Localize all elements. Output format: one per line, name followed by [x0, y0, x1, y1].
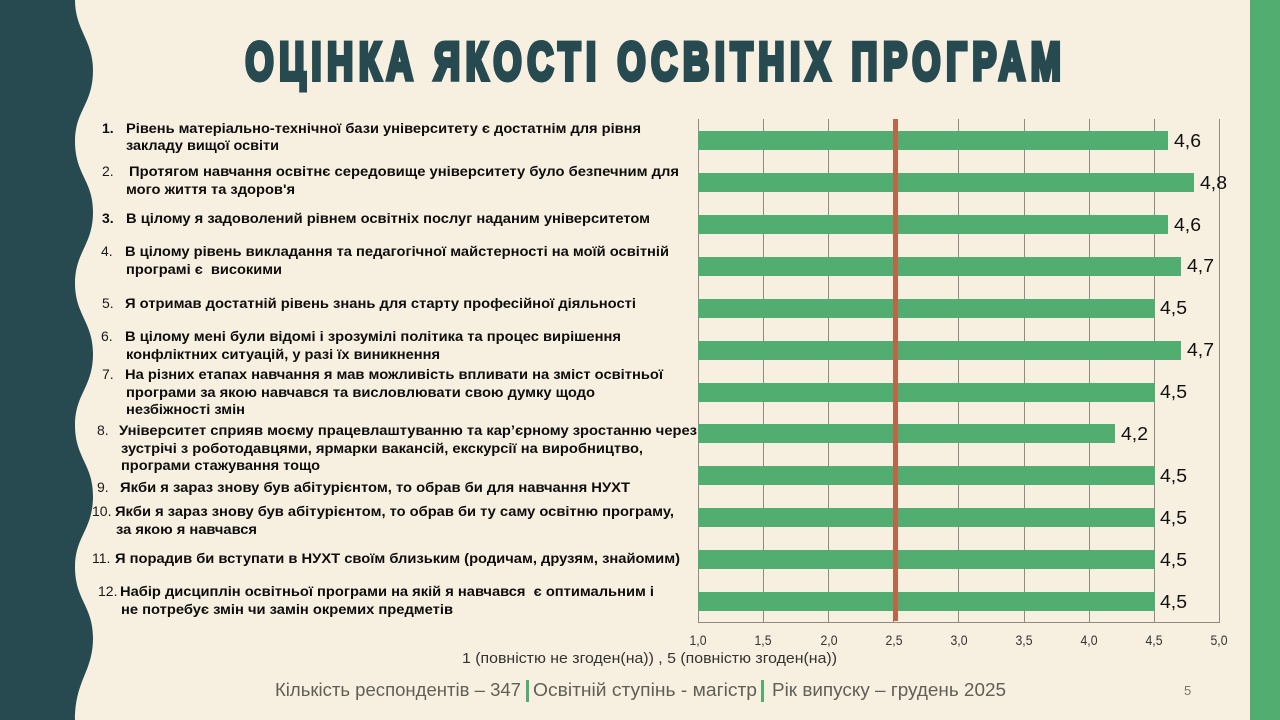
question 7: На різних етапах навчання я мав можливість впливати на зміст освітньої — [125, 367, 664, 382]
bars — [698, 131, 1194, 611]
question 12: не потребує змін чи замін окремих предметів — [121, 602, 453, 617]
x axis ticks: 5,0 — [1210, 632, 1228, 648]
value labels: 4,7 — [1187, 339, 1214, 360]
question 4: програмі є високими — [126, 262, 282, 277]
value labels: 4,5 — [1160, 507, 1187, 528]
question 8 — [97, 422, 697, 473]
question 11: Я порадив би вступати в НУХТ своїм близьким (родичам, друзям, знайомим) — [115, 551, 680, 566]
question 1 — [102, 120, 641, 153]
value labels — [1121, 130, 1227, 612]
title: ОЦІНКА ЯКОСТІ ОСВІТНІХ ПРОГРАМ — [245, 32, 1061, 91]
question 3: В цілому я задоволений рівнем освітніх послуг наданим університетом — [126, 211, 650, 226]
x axis ticks: 1,0 — [690, 632, 707, 648]
footer: Кількість респондентів – 347 — [275, 680, 521, 700]
question list — [92, 120, 697, 617]
question 5: 5. — [102, 295, 114, 311]
question 1: 1. — [102, 120, 114, 136]
question 7 — [102, 366, 664, 417]
question 1: Рівень матеріально-технічної бази університету є достатнім для рівня — [126, 121, 641, 136]
question 7: 7. — [102, 366, 114, 382]
x axis ticks: 4,0 — [1080, 632, 1098, 648]
value labels: 4,8 — [1200, 172, 1227, 193]
question 2: мого життя та здоров'я — [126, 182, 295, 197]
x axis ticks: 2,0 — [820, 632, 838, 648]
question 5: Я отримав достатній рівень знань для старту професійної діяльності — [125, 296, 636, 311]
question 8: зустрічі з роботодавцями, ярмарки вакансій, екскурсії на виробництво, — [121, 441, 643, 456]
question 10: Якби я зараз знову був абітурієнтом, то обрав би ту саму освітню програму, — [115, 504, 674, 519]
question 12 — [98, 583, 654, 617]
value labels: 4,2 — [1121, 423, 1148, 444]
question 8: Університет сприяв моєму працевлаштуванню та кар’єрному зростанню через — [119, 423, 697, 438]
value labels: 4,7 — [1187, 255, 1214, 276]
axis caption: 1 (повністю не згоден(на)) , 5 (повністю згоден(на)) — [462, 651, 837, 667]
question 6 — [101, 328, 621, 362]
x axis ticks: 1,5 — [754, 632, 772, 648]
question 9: 9. — [97, 479, 109, 495]
question 11: 11. — [92, 550, 110, 566]
value labels: 4,5 — [1160, 549, 1187, 570]
right green band — [1250, 0, 1280, 720]
question 2: 2. — [102, 163, 114, 179]
value labels: 4,6 — [1174, 130, 1201, 151]
footer — [275, 680, 1006, 702]
question 4: В цілому рівень викладання та педагогічної майстерності на моїй освітній — [125, 244, 669, 259]
question 3: 3. — [102, 210, 114, 226]
question 10: 10. — [92, 503, 111, 519]
question 2 — [102, 163, 679, 197]
question 6: 6. — [101, 328, 113, 344]
question 1: закладу вищої освіти — [126, 138, 279, 153]
value labels: 4,5 — [1160, 381, 1187, 402]
value labels: 4,6 — [1174, 214, 1201, 235]
question 12: Набір дисциплін освітньої програми на якій я навчався є оптимальним і — [120, 584, 654, 599]
footer: Рік випуску – грудень 2025 — [772, 680, 1006, 700]
question 8: 8. — [97, 422, 109, 438]
x axis ticks: 3,0 — [950, 632, 968, 648]
question 6: В цілому мені були відомі і зрозумілі політика та процес вирішення — [125, 329, 621, 344]
question 4: 4. — [101, 243, 113, 259]
question 10: за якою я навчався — [116, 522, 257, 537]
value labels: 4,5 — [1160, 465, 1187, 486]
question 7: незбіжності змін — [126, 402, 245, 417]
question 9: Якби я зараз знову був абітурієнтом, то обрав би для навчання НУХТ — [120, 480, 631, 495]
bar chart — [690, 119, 1228, 648]
footer: Освітній ступінь - магістр — [533, 680, 757, 700]
question 2: Протягом навчання освітнє середовище університету було безпечним для — [129, 164, 679, 179]
value labels: 4,5 — [1160, 591, 1187, 612]
x axis ticks: 3,5 — [1016, 632, 1033, 648]
threshold line at 2.5 — [893, 119, 898, 621]
question 4 — [101, 243, 669, 277]
page number: 5 — [1184, 683, 1191, 698]
question 8: програми стажування тощо — [121, 458, 320, 473]
left wavy band — [0, 0, 93, 720]
question 12: 12. — [98, 583, 117, 599]
x axis ticks: 2,5 — [886, 632, 903, 648]
question 6: конфліктних ситуацій, у разі їх виникнення — [126, 347, 440, 362]
x axis ticks: 4,5 — [1146, 632, 1163, 648]
question 10 — [92, 503, 674, 537]
x axis ticks — [690, 632, 1228, 648]
value labels: 4,5 — [1160, 297, 1187, 318]
question 7: програми за якою навчався та висловлювати свою думку щодо — [126, 385, 595, 400]
